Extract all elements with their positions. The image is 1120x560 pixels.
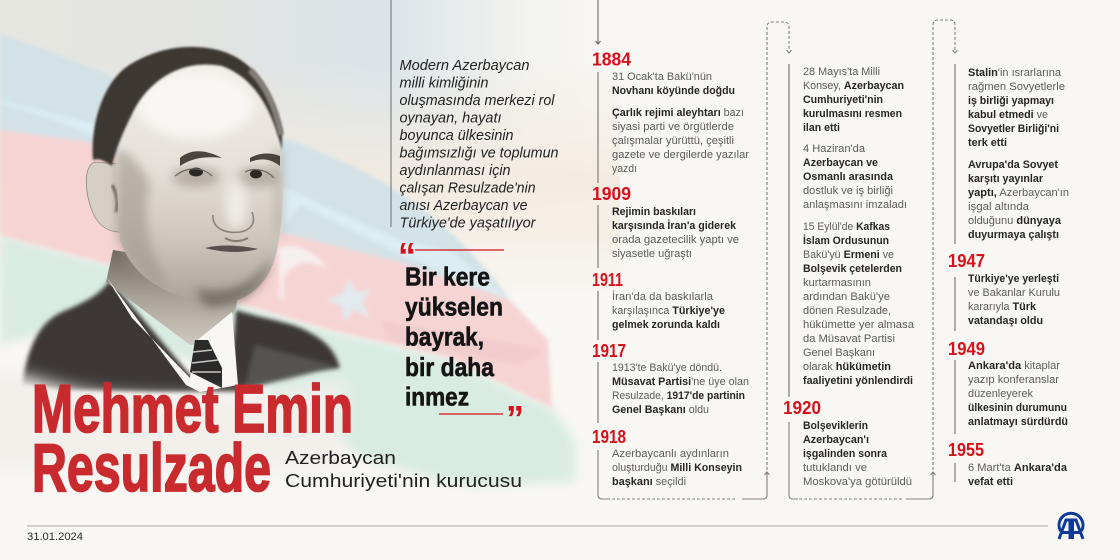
- year 1920: 1920: [783, 397, 821, 418]
- introduction text: Türkiye'de yaşatılıyor: [400, 216, 537, 232]
- text: 1917 entry: [612, 362, 749, 416]
- text: 1884 entry: [612, 71, 749, 175]
- text: 1917 entry: 1913'te Bakü'ye döndü.: [612, 362, 722, 374]
- text: 1918 entry continued: dönen Resulzade,: [803, 305, 891, 317]
- quote text: Bir kere: [405, 262, 490, 292]
- text: 1884 entry: Çarlık rejimi aleyhtarı bazı: [612, 107, 744, 119]
- text: 1884 entry: siyasi parti ve örgütlerde: [612, 121, 734, 133]
- text: 1949 entry: [968, 360, 1068, 428]
- date: 31.01.2024: [27, 531, 83, 543]
- text: 1918 entry continued: [803, 66, 915, 387]
- portrait: tie: [190, 340, 222, 388]
- quote text: yükselen: [405, 292, 503, 322]
- text: 1909 entry: orada gazetecilik yaptı ve: [612, 234, 739, 246]
- text: 1955 entry: 6 Mart'ta Ankara'da: [968, 462, 1068, 474]
- portrait: bottom mist: [0, 368, 345, 470]
- quote block: [398, 235, 524, 439]
- text: 1947 entry: Türkiye'ye yerleşti: [968, 273, 1059, 285]
- text: 1920 entry continued: karşıtı yayınlar: [968, 173, 1044, 185]
- text: 1920 entry continued: [968, 67, 1069, 241]
- flag of Azerbaijan backdrop: [0, 33, 575, 487]
- text: 1920 entry continued: yaptı, Azerbaycan'ın: [968, 187, 1069, 199]
- title: [32, 371, 353, 506]
- footer rule: [27, 525, 1048, 527]
- connector: column 1 to column 2: [598, 22, 792, 499]
- text: 1918 entry continued: da Müsavat Partisi: [803, 333, 895, 345]
- opening quote mark: “: [398, 235, 416, 276]
- introduction text: bağımsızlığı ve toplumun: [400, 146, 558, 162]
- portrait photo: [0, 47, 345, 470]
- introduction text: oynayan, hayatı: [400, 110, 502, 126]
- year 1884: 1884: [592, 48, 632, 70]
- year 1955: 1955: [948, 439, 984, 460]
- portrait: jacket: [22, 280, 340, 392]
- title: Mehmet Emin: [32, 371, 353, 447]
- text: 1918 entry continued: 15 Eylül'de Kafkas: [803, 221, 890, 233]
- text: 1918 entry continued: ardından Bakü'ye: [803, 291, 890, 303]
- text: 1918 entry continued: anlaşmasını imzaladı: [803, 199, 907, 211]
- text: 1918 entry continued: Bolşevik çetelerden: [803, 263, 902, 275]
- text: 1911 entry: [612, 290, 725, 331]
- introduction text: [400, 58, 558, 232]
- text: 1920 entry: tutuklandı ve: [803, 462, 867, 474]
- text: 1884 entry: çalışmalar yürüttü, çeşitli: [612, 135, 734, 147]
- text: 1917 entry: Müsavat Partisi'ne üye olan: [612, 376, 749, 388]
- text: 1920 entry: [803, 420, 912, 488]
- text: 1955 entry: [968, 462, 1068, 488]
- timeline column 1: [592, 48, 749, 488]
- connector: column 2 to column 3: [789, 20, 958, 499]
- text: 1911 entry: karşılaşınca Türkiye'ye: [612, 305, 725, 317]
- text: 1920 entry continued: rağmen Sovyetlerle: [968, 81, 1065, 93]
- flag: blue band: [0, 33, 510, 300]
- introduction text: çalışan Resulzade'nin: [400, 180, 536, 196]
- introduction text: oluşmasında merkezi rol: [400, 93, 555, 109]
- subtitle: Cumhuriyeti'nin kurucusu: [285, 471, 522, 491]
- timeline column 2: [783, 66, 915, 488]
- timeline connector lines: [596, 0, 958, 499]
- subtitle: [285, 448, 522, 491]
- text: 1947 entry: [968, 273, 1060, 327]
- icon: AA logo: [1059, 513, 1083, 539]
- text: 1949 entry: anlatmayı sürdürdü: [968, 416, 1068, 428]
- year 1949: 1949: [948, 338, 985, 359]
- text: 1918 entry: başkanı seçildi: [612, 476, 686, 488]
- text: 1920 entry continued: olduğunu dünyaya: [968, 215, 1062, 227]
- flag: mid red fold: [380, 320, 545, 365]
- title: Resulzade: [32, 430, 271, 506]
- introduction text: anısı Azerbaycan ve: [400, 198, 528, 214]
- text: 1918 entry continued: 28 Mayıs'ta Milli: [803, 66, 880, 78]
- text: 1918 entry continued: Osmanlı arasında: [803, 171, 894, 183]
- text: 1920 entry continued: Avrupa'da Sovyet: [968, 159, 1058, 171]
- portrait: neck: [106, 250, 242, 345]
- text: 1917 entry: Resulzade, 1917'de partinin: [612, 390, 745, 402]
- text: 1920 entry: Bolşeviklerin: [803, 420, 868, 432]
- text: 1918 entry continued: Azerbaycan ve: [803, 157, 878, 169]
- year 1947: 1947: [948, 250, 985, 271]
- text: 1920 entry: işgalinden sonra: [803, 448, 888, 460]
- introduction text: milli kimliğinin: [400, 76, 488, 92]
- text: 1909 entry: [612, 206, 739, 260]
- arrow: start into column 1: [596, 0, 600, 44]
- text: 1920 entry continued: işgal altında: [968, 201, 1030, 213]
- text: 1918 entry continued: dostluk ve iş birliği: [803, 185, 893, 197]
- portrait: ear: [86, 162, 125, 232]
- text: 1918 entry continued: Cumhuriyeti'nin: [803, 94, 883, 106]
- text: 1949 entry: Ankara'da kitaplar: [968, 360, 1060, 372]
- portrait: hair: [93, 47, 282, 166]
- text: 1918 entry: Azerbaycanlı aydınların: [612, 448, 729, 460]
- text: 1918 entry continued: ilan etti: [803, 122, 840, 134]
- text: 1955 entry: vefat etti: [968, 476, 1013, 488]
- text: 1920 entry continued: Stalin'in ısrarlarına: [968, 67, 1062, 79]
- text: 1918 entry continued: Genel Başkanı: [803, 347, 875, 359]
- text: 1949 entry: ülkesinin durumunu: [968, 402, 1067, 414]
- flag: green band: [0, 235, 575, 487]
- quote text: bir daha: [405, 352, 494, 382]
- text: 1918 entry continued: Konsey, Azerbaycan: [803, 80, 904, 92]
- year 1911: 1911: [592, 269, 623, 290]
- text: 1884 entry: Novhanı köyünde doğdu: [612, 85, 735, 97]
- closing quote mark: ”: [506, 398, 524, 439]
- text: 1947 entry: kararıyla Türk: [968, 301, 1037, 313]
- year 1918: 1918: [592, 426, 626, 447]
- introduction text: boyunca ülkesinin: [400, 128, 514, 144]
- top vertical rule: [390, 0, 392, 227]
- quote text: [405, 262, 503, 412]
- year 1917: 1917: [592, 340, 626, 361]
- text: 1918 entry continued: faaliyetini yönlendirdi: [803, 375, 913, 387]
- text: 1918 entry continued: hükümette yer almasa: [803, 319, 915, 331]
- text: 1918 entry continued: kurulmasını resmen: [803, 108, 902, 120]
- year 1909: 1909: [592, 183, 631, 204]
- text: 1909 entry: karşısında İran'a giderek: [612, 219, 737, 232]
- text: 1947 entry: vatandaşı oldu: [968, 315, 1043, 327]
- text: 1920 entry continued: duyurmaya çalıştı: [968, 229, 1059, 241]
- text: 1909 entry: Rejimin baskıları: [612, 206, 696, 218]
- quote text: inmez: [405, 382, 469, 412]
- text: 1947 entry: ve Bakanlar Kurulu: [968, 287, 1060, 299]
- text: 1920 entry continued: terk etti: [968, 137, 1007, 149]
- flag: crescent: [278, 246, 328, 300]
- text: 1920 entry continued: iş birliği yapmayı: [968, 95, 1054, 107]
- text: 1920 entry: Azerbaycan'ı: [803, 434, 869, 446]
- flag: red band: [0, 130, 552, 408]
- portrait: face: [116, 62, 283, 303]
- portrait: face shading: [116, 71, 284, 306]
- text: 1918 entry continued: 4 Haziran'da: [803, 143, 866, 155]
- text: 1949 entry: yazıp konferanslar: [968, 374, 1059, 386]
- text: 1884 entry: 31 Ocak'ta Bakü'nün: [612, 71, 712, 83]
- subtitle: Azerbaycan: [285, 448, 396, 468]
- text: 1918 entry: oluşturduğu Milli Konseyin: [612, 462, 742, 474]
- flag: pale blue highlight: [0, 100, 510, 300]
- text: 1949 entry: düzenleyerek: [968, 388, 1033, 400]
- quote text: bayrak,: [405, 322, 484, 352]
- text: 1920 entry continued: kabul etmedi ve: [968, 109, 1048, 121]
- portrait: facial features: [175, 151, 280, 252]
- text: 1884 entry: yazdı: [612, 163, 637, 175]
- flag: star: [326, 278, 372, 322]
- text: 1918 entry continued: Bakü'yü Ermeni ve: [803, 249, 894, 261]
- text: 1918 entry continued: kurtarmasının: [803, 277, 871, 289]
- text: 1918 entry: [612, 448, 742, 488]
- text: 1909 entry: siyasetle uğraştı: [612, 248, 692, 260]
- portrait: shirt collar: [107, 278, 238, 392]
- timeline column 3: [948, 67, 1069, 488]
- text: 1920 entry continued: Sovyetler Birliği'ni: [968, 123, 1059, 135]
- text: 1918 entry continued: İslam Ordusunun: [803, 234, 889, 247]
- text: 1918 entry continued: olarak hükümetin: [803, 361, 891, 373]
- text: 1884 entry: gazete ve dergilerde yazılar: [612, 149, 749, 161]
- text: 1917 entry: Genel Başkanı oldu: [612, 404, 709, 416]
- introduction text: Modern Azerbaycan: [400, 58, 530, 74]
- text: 1911 entry: gelmek zorunda kaldı: [612, 319, 720, 331]
- text: 1920 entry: Moskova'ya götürüldü: [803, 476, 912, 488]
- introduction text: aydınlanması için: [400, 163, 510, 179]
- text: 1911 entry: İran'da da baskılarla: [612, 290, 714, 303]
